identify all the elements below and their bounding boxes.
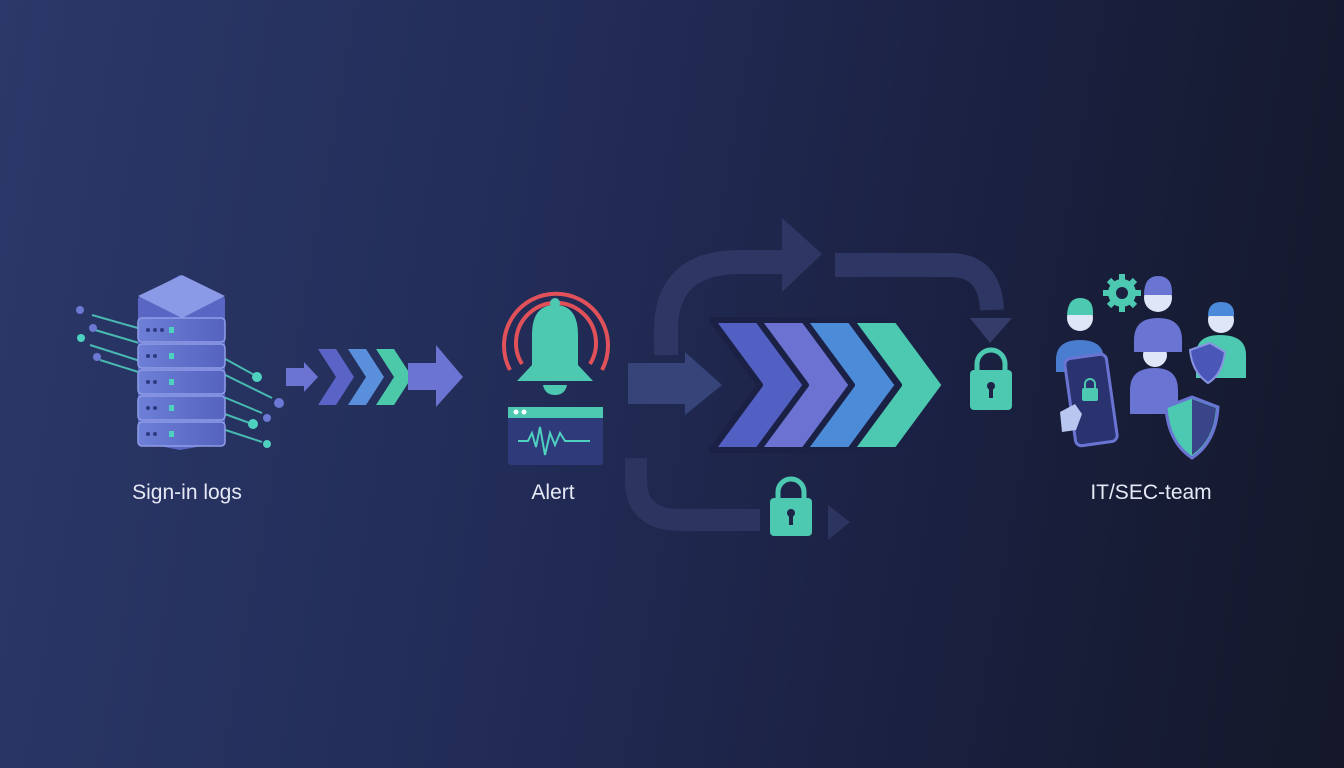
arrow: top curved arrow	[666, 218, 1012, 355]
arrow: large chevrons	[712, 320, 945, 450]
shield large	[1166, 397, 1218, 458]
arrow: bottom curved arrow	[636, 458, 850, 540]
label: Sign-in logs: Sign-in logs	[132, 481, 242, 504]
shield small	[1190, 343, 1225, 383]
icon: server with data lines	[76, 275, 284, 450]
label: IT/SEC-team: IT/SEC-team	[1090, 481, 1212, 504]
icon: lock bottom	[770, 479, 812, 536]
arrow: big arrow to chevrons	[628, 352, 722, 415]
arrow: small chevron arrow	[286, 345, 463, 407]
tablet	[1064, 354, 1118, 446]
icon: alert bell with monitor	[504, 294, 608, 465]
person left	[1056, 340, 1104, 372]
icon: lock right	[970, 350, 1012, 410]
label: Alert: Alert	[531, 481, 575, 504]
icon: IT/SEC team	[1056, 274, 1246, 458]
gear	[1103, 274, 1141, 312]
person center	[1130, 368, 1178, 414]
person top	[1134, 318, 1182, 352]
person right	[1196, 335, 1246, 378]
